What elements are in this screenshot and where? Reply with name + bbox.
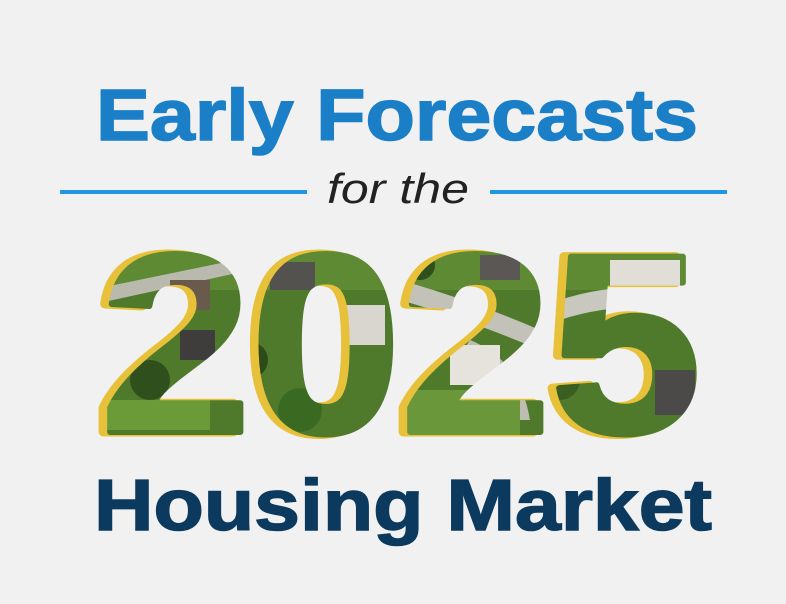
divider line left bbox=[60, 190, 307, 194]
divider line right bbox=[490, 190, 727, 194]
big year 2025 with aerial photo fill: 2025 bbox=[101, 202, 701, 487]
heading: Housing Market: Housing Market bbox=[94, 466, 712, 546]
big year 2025 with aerial photo fill: 2025 bbox=[94, 202, 694, 487]
title: Early Forecasts: Early Forecasts bbox=[96, 76, 698, 156]
subtitle: for the: for the bbox=[327, 165, 469, 212]
